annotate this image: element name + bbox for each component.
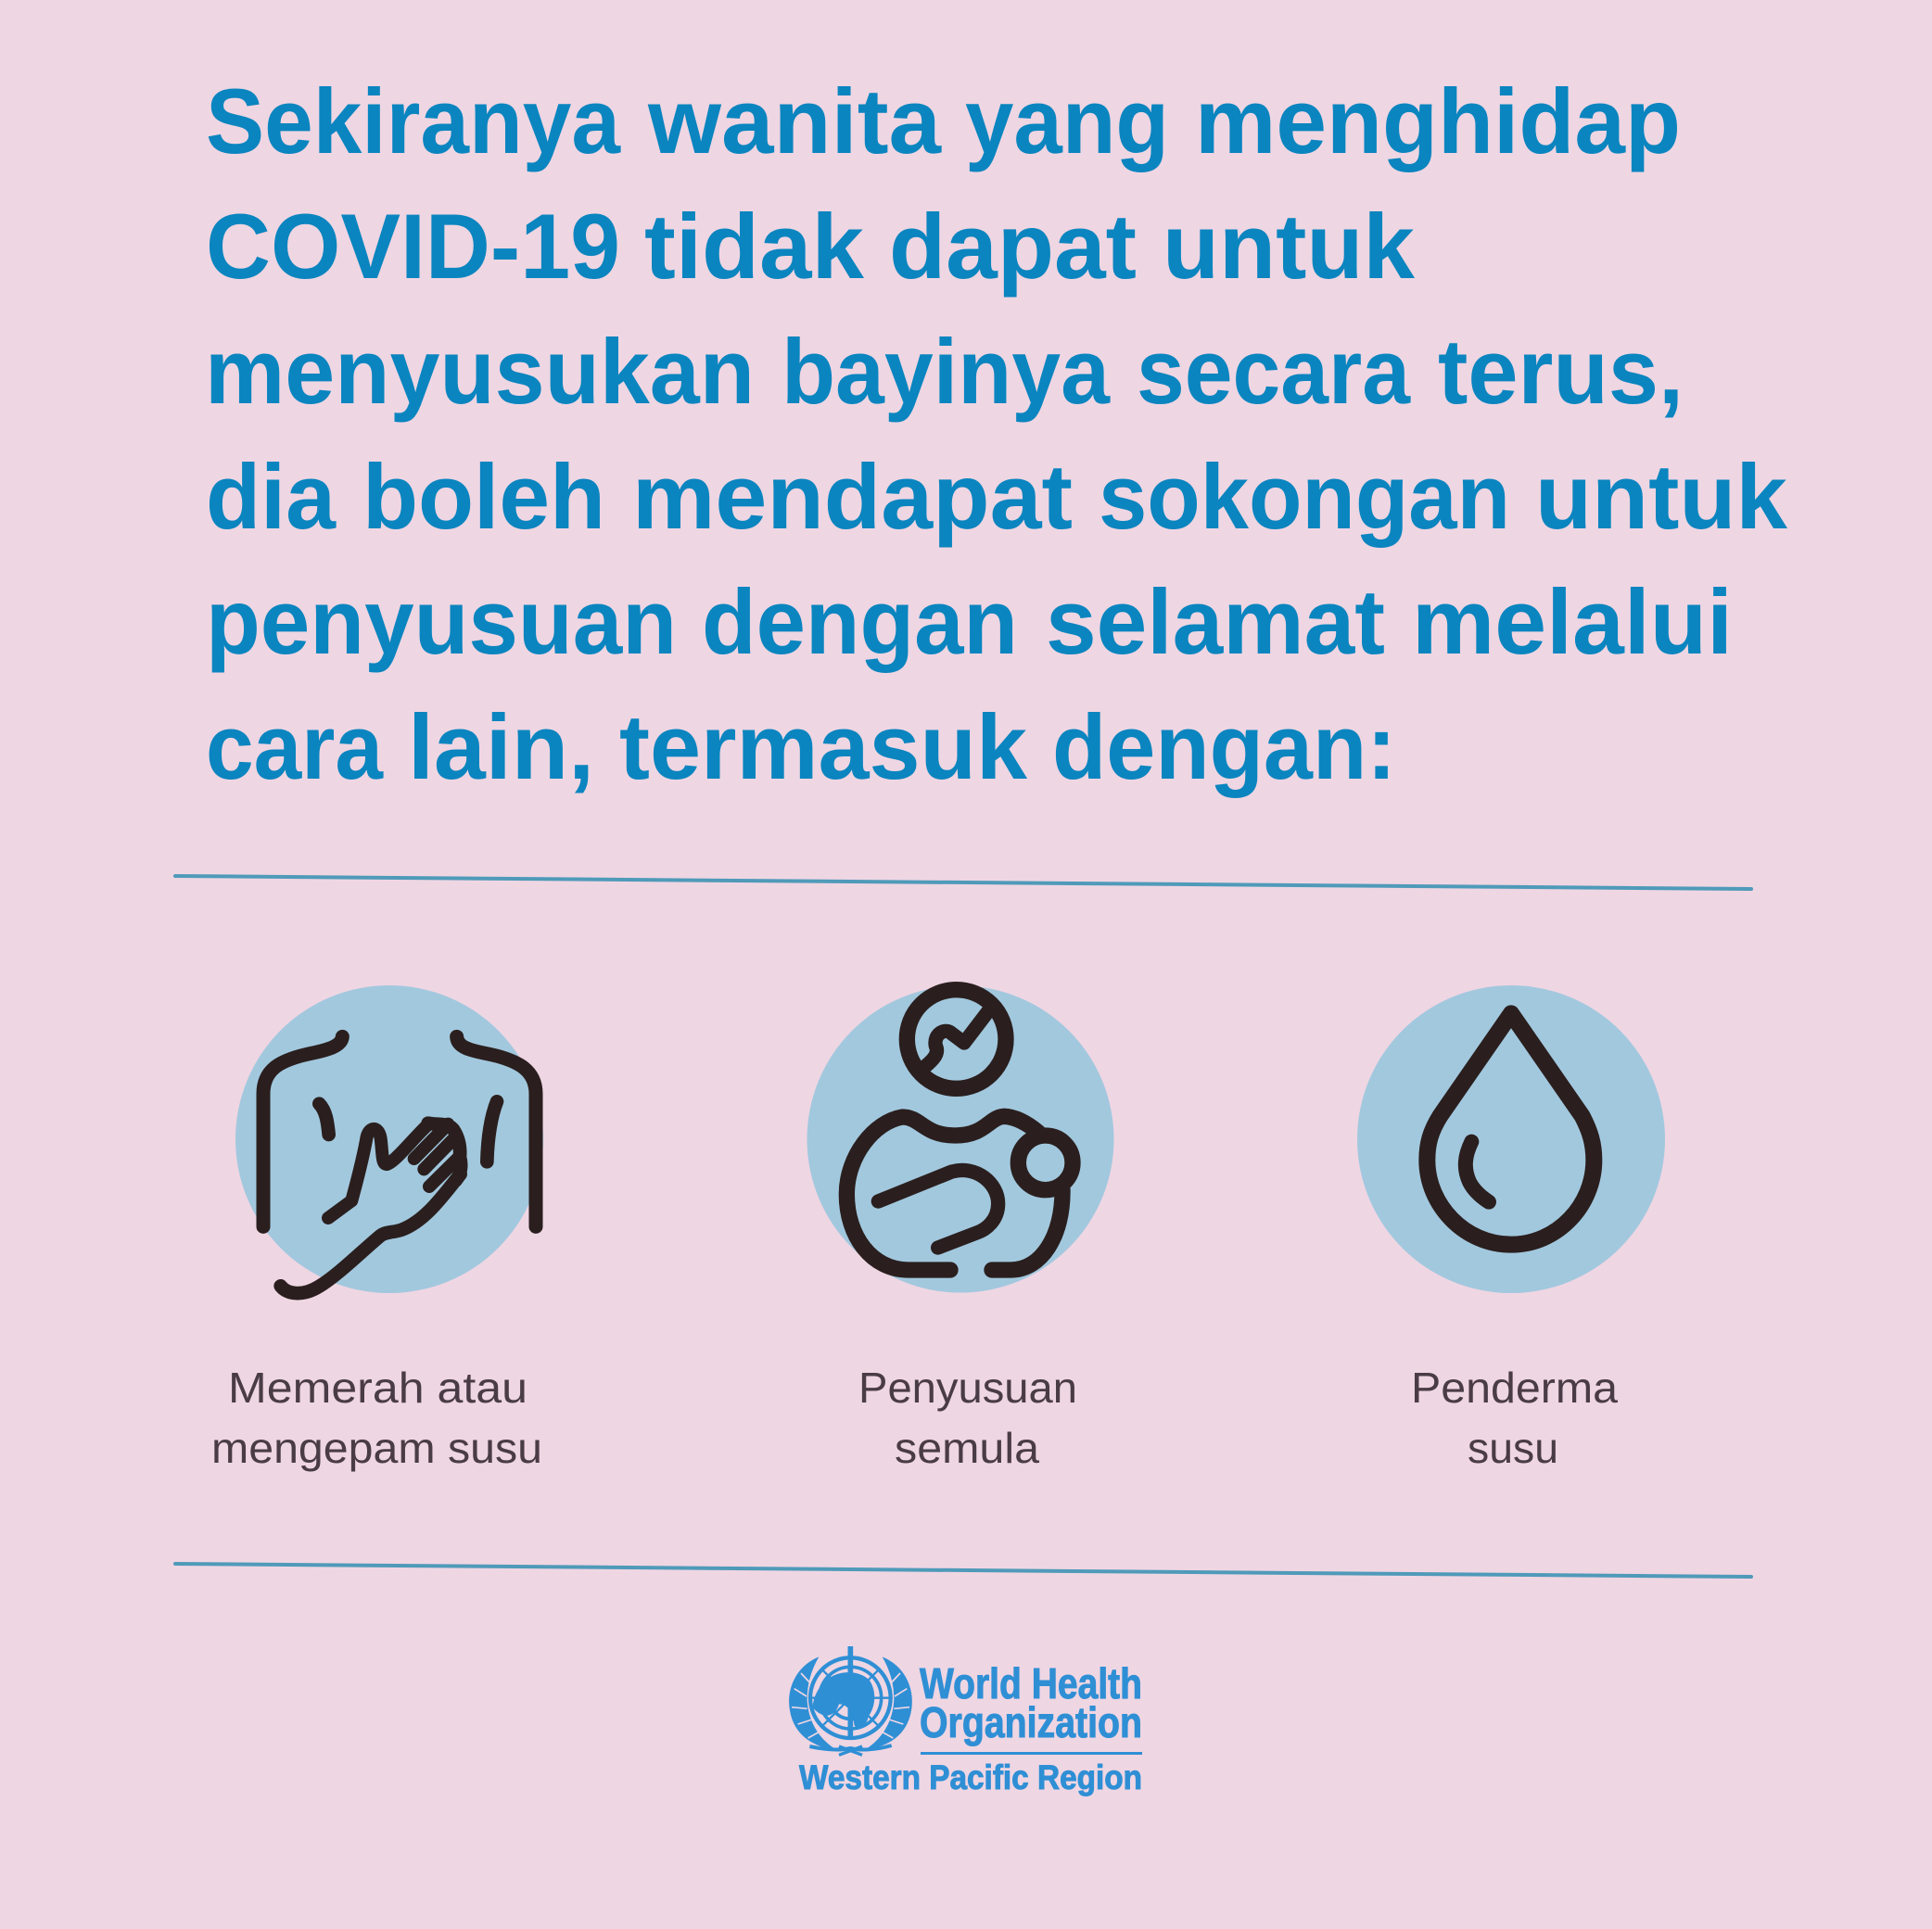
title: mendapat xyxy=(632,445,1073,548)
label: donor milk xyxy=(1411,1364,1618,1472)
title: dengan: xyxy=(1052,695,1396,798)
title: yang xyxy=(965,70,1169,172)
label: expressing milk xyxy=(211,1364,542,1472)
title: dengan xyxy=(702,570,1018,673)
title: untuk xyxy=(1535,445,1788,548)
title: tidak xyxy=(644,195,865,298)
text: Western Pacific Region: Western Pacific Region xyxy=(799,1758,1142,1796)
title: boleh xyxy=(362,445,605,548)
text: World Health Organization: World Health xyxy=(920,1659,1142,1707)
text: World Health Organization xyxy=(920,1659,1142,1746)
title: dia xyxy=(206,445,337,548)
title: terus, xyxy=(1438,320,1684,423)
icon: relactation mother and baby xyxy=(807,986,1114,1292)
label: donor milk: susu xyxy=(1468,1424,1558,1472)
title: dapat xyxy=(889,195,1137,298)
text: World Health Organization: Organization xyxy=(920,1698,1142,1746)
icon: WHO emblem xyxy=(789,1646,912,1755)
title: untuk xyxy=(1163,195,1416,298)
title: wanita xyxy=(647,70,942,172)
title: termasuk xyxy=(619,695,1028,798)
title: COVID-19 xyxy=(206,195,620,298)
label: expressing milk: mengepam susu xyxy=(211,1424,542,1472)
title: penyusuan xyxy=(206,570,677,673)
icon: hand expressing breast milk xyxy=(235,985,543,1293)
title: menghidap xyxy=(1195,70,1681,172)
title: secara xyxy=(1137,320,1411,423)
label: relactation: Penyusuan xyxy=(858,1364,1077,1412)
title: sokongan xyxy=(1099,445,1510,548)
label: relactation xyxy=(858,1364,1077,1472)
title: selamat xyxy=(1046,570,1385,673)
title: lain, xyxy=(408,695,594,798)
label: relactation: semula xyxy=(895,1424,1039,1472)
icon: donor milk drop xyxy=(1357,985,1665,1293)
label: donor milk: Penderma xyxy=(1411,1364,1618,1412)
title xyxy=(205,70,1788,798)
title: bayinya xyxy=(782,320,1111,423)
title: melalui xyxy=(1412,570,1733,673)
title: Sekiranya xyxy=(206,70,621,172)
logo: World Health Organization xyxy=(789,1646,1142,1796)
title: menyusukan xyxy=(205,320,755,423)
label: expressing milk: Memerah atau xyxy=(228,1364,527,1412)
title: cara xyxy=(206,695,384,798)
